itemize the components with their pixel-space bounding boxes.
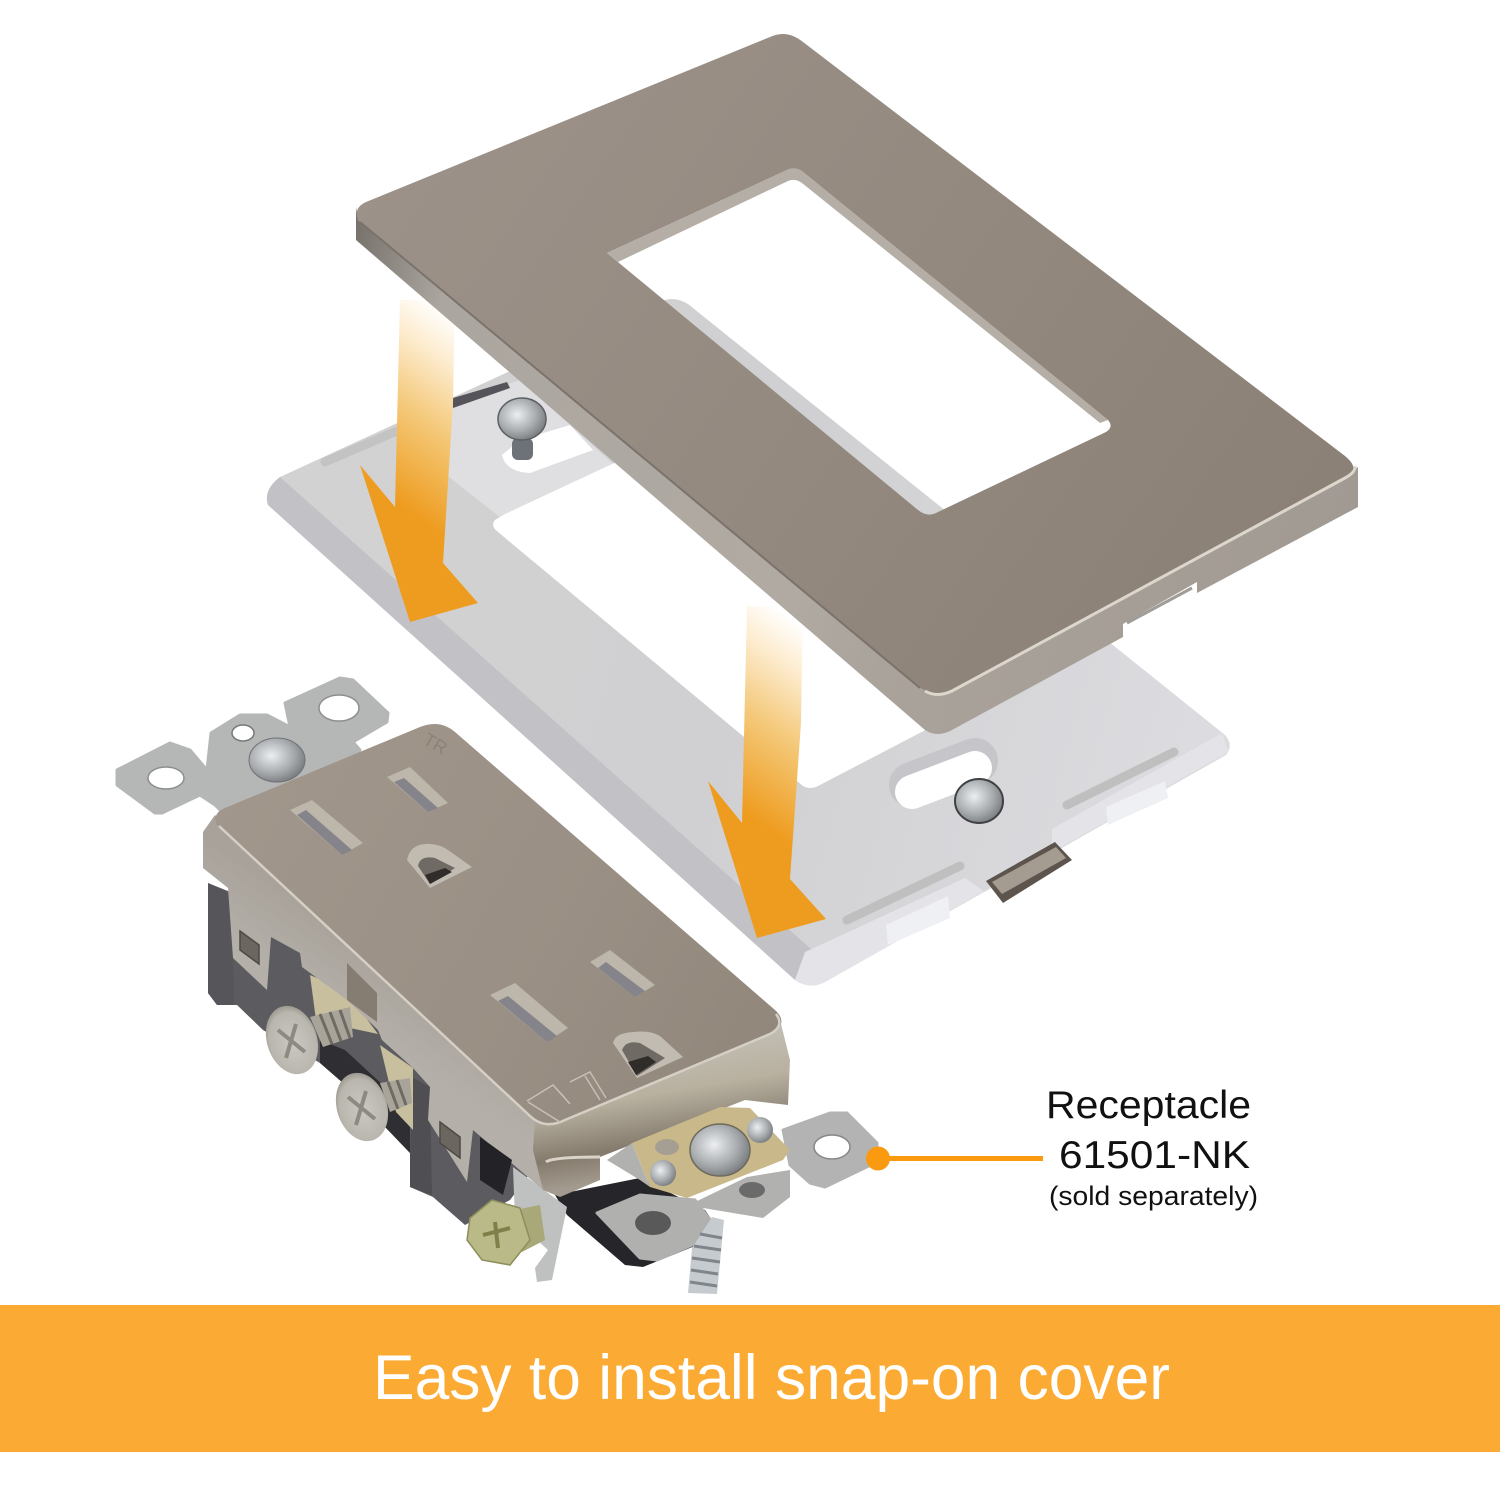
wall recess bbox=[347, 963, 377, 1022]
front wall tab highlight bbox=[546, 1157, 600, 1162]
long screw bbox=[688, 1217, 724, 1294]
right ear hole bbox=[814, 1135, 850, 1159]
strap left wedge bbox=[607, 1143, 650, 1187]
left tab bbox=[886, 896, 950, 945]
ground hole bottom bbox=[613, 1032, 683, 1078]
slot bottom left bbox=[490, 983, 568, 1042]
lower screw bbox=[955, 779, 1003, 823]
left metal wall bbox=[203, 815, 560, 1190]
banner background bbox=[0, 1305, 1500, 1452]
callout: receptacle bbox=[866, 1084, 1258, 1211]
engraved logo bbox=[527, 1072, 606, 1122]
plate body bbox=[267, 299, 1230, 986]
oval hole recess bbox=[912, 761, 975, 785]
ear holes bbox=[148, 767, 184, 789]
ground hole top bbox=[407, 844, 472, 888]
square clip window lower bbox=[440, 1122, 460, 1158]
plate top lighter region bbox=[440, 380, 620, 525]
top ear screw bbox=[249, 738, 305, 782]
brass contact upper bbox=[310, 975, 378, 1034]
right arrow bbox=[708, 606, 826, 938]
side screw lower bbox=[327, 1066, 412, 1148]
face edge highlights bbox=[219, 826, 779, 1124]
green ground screw bbox=[467, 1200, 545, 1265]
brass plate bbox=[632, 1107, 790, 1198]
right groove bbox=[1067, 752, 1174, 805]
lower strap bbox=[607, 1143, 790, 1218]
right tab bbox=[1106, 781, 1168, 825]
callout model number: 61501-NK bbox=[1059, 1134, 1250, 1177]
mounting plate bbox=[267, 299, 1230, 986]
upper screw bbox=[498, 398, 546, 440]
top mounting ear bbox=[117, 678, 388, 815]
wall black gap bbox=[480, 1137, 512, 1195]
cover plate bbox=[356, 34, 1358, 734]
lower plate bbox=[597, 1195, 720, 1260]
upper screw shaft bbox=[512, 438, 533, 460]
ground tab bbox=[513, 1167, 567, 1282]
cover lower-right highlight bbox=[925, 466, 1355, 694]
opening inner lip bbox=[607, 168, 1108, 423]
plate opening bbox=[493, 451, 960, 788]
side screw upper bbox=[257, 999, 353, 1081]
front metal wall bbox=[533, 1020, 790, 1197]
side housing bbox=[208, 883, 540, 1225]
receptacle face bbox=[216, 724, 781, 1124]
square clip window upper bbox=[240, 931, 259, 964]
left groove bbox=[847, 866, 960, 920]
top slit bbox=[453, 382, 510, 408]
upper groove bbox=[325, 431, 397, 462]
callout dot bbox=[866, 1146, 890, 1170]
plate left bevel bbox=[267, 477, 812, 980]
brass slot bbox=[655, 1139, 679, 1155]
strap hole bbox=[739, 1182, 765, 1198]
lower black housing bbox=[555, 1178, 722, 1267]
left arrow bbox=[360, 300, 478, 622]
slot top left bbox=[290, 800, 363, 855]
cover face with opening bbox=[357, 34, 1354, 694]
housing pillar right bbox=[410, 1078, 432, 1195]
callout note: (sold separately) bbox=[1049, 1181, 1258, 1211]
banner bbox=[0, 1305, 1500, 1452]
metal clip bbox=[986, 842, 1072, 903]
slot bottom right bbox=[590, 950, 655, 997]
right mounting ear bbox=[783, 1113, 877, 1187]
banner text: Easy to install snap-on cover bbox=[373, 1343, 1170, 1413]
centre screw bbox=[690, 1124, 750, 1176]
callout label: Receptacle bbox=[1046, 1084, 1251, 1127]
slot top right bbox=[387, 767, 448, 812]
receptacle bbox=[117, 678, 877, 1294]
cover notch lip bbox=[1127, 588, 1192, 623]
lower plate hole bbox=[635, 1211, 671, 1235]
engraved mark: TR bbox=[420, 729, 451, 758]
housing pillar left bbox=[208, 883, 234, 1005]
upper screw hole bbox=[502, 425, 593, 473]
oval hole bbox=[912, 768, 975, 792]
housing black gap bbox=[320, 1040, 410, 1153]
cover side wall bbox=[356, 207, 1358, 734]
brass contact lower bbox=[380, 1045, 413, 1130]
cover lower-left edge line bbox=[360, 222, 920, 688]
plate right bevel bbox=[795, 733, 1228, 986]
callout leader line bbox=[878, 1156, 1043, 1161]
brass small screw right bbox=[747, 1117, 773, 1143]
brass small screw left bbox=[650, 1160, 676, 1186]
